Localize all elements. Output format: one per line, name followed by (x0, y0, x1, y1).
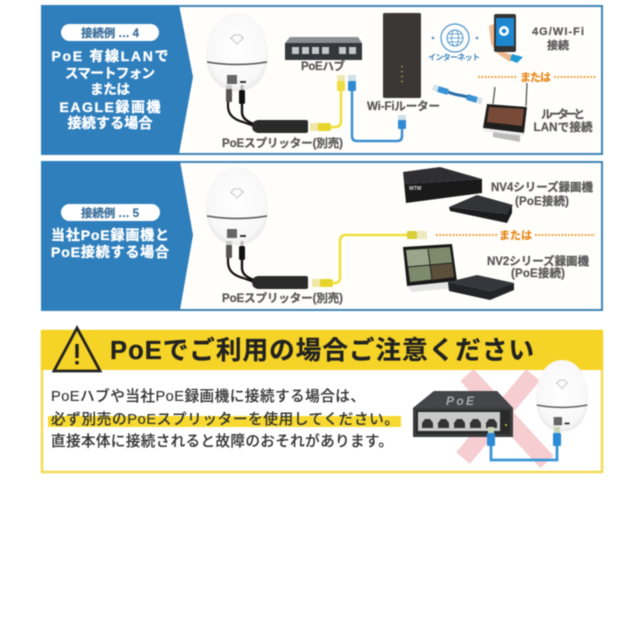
heading: blue arrow banner example 5 (41, 161, 193, 310)
text: NV4 series recorder: NV4シリーズ録画機 (491, 180, 594, 194)
icon: LAN cable router to monitor (433, 87, 482, 101)
arrow: yellow cable splitter to hub (310, 75, 345, 131)
icon: PoE hub (285, 37, 362, 60)
text: connect to router by LAN: LANで接続 (534, 120, 593, 134)
heading: blue arrow banner example 4: 接続例 … 4 (81, 26, 140, 40)
icon: PoE hub: PoE (446, 394, 475, 408)
icon: internet globe (432, 24, 478, 52)
heading: blue arrow banner example 4: 接続する場合 (68, 115, 152, 131)
icon: Wi-Fi router (383, 13, 421, 98)
panel: connection example 5 (41, 161, 602, 310)
heading: blue arrow banner example 4: PoE 有線LANで (52, 48, 168, 64)
icon: red cross (463, 375, 547, 462)
text: NV2 series recorder: NV2シリーズ録画機 (487, 254, 590, 268)
text: 4G/Wi-Fi connection: 4G/WI-Fi (532, 26, 584, 38)
text: connect to router by LAN (534, 108, 593, 134)
label: Wi-Fi router: Wi-Fiルーター (367, 100, 440, 113)
heading: blue arrow banner example 5: 接続例 … 5 (81, 206, 140, 220)
icon: PoE splitter with cables (226, 85, 308, 133)
arrow: blue cable hub to camera (487, 427, 561, 460)
icon: PoE hub (413, 391, 513, 437)
text: NV4 series recorder (491, 180, 594, 208)
label: PoE splitter: PoEスプリッター(別売) (222, 136, 343, 150)
icon: dome camera (206, 167, 268, 245)
arrow: yellow cable splitter to recorder (312, 231, 427, 287)
label: PoE splitter: PoEスプリッター(別売) (222, 291, 343, 305)
text: caution body: PoEハブや当社PoE録画機に接続する場合は、 (51, 387, 365, 405)
text: NV2 series recorder: (PoE接続) (511, 266, 565, 280)
icon: monitor recorder (483, 83, 527, 142)
icon: NV4 small recorder (449, 195, 513, 223)
heading band: caution title (41, 330, 603, 370)
panel: PoE caution (41, 328, 603, 472)
text: caution body: 直接本体に接続されると故障のおそれがあります。 (51, 432, 393, 450)
icon: NV4 large recorder (403, 167, 482, 203)
highlight: marker (48, 416, 401, 427)
text: 4G/Wi-Fi connection: 接続 (547, 38, 569, 52)
arrow: blue cable hub to router (348, 75, 406, 141)
divider: or: または (520, 71, 551, 84)
text: NV2 series recorder (487, 254, 590, 280)
text: connect to router by LAN: ルーターと (541, 108, 585, 121)
panel: connection example 4 (41, 5, 602, 154)
heading band: caution title: PoEでご利用の場合ご注意ください (110, 336, 534, 365)
icon: dome camera (536, 360, 588, 432)
icon: NV2 recorder (448, 275, 514, 300)
heading: blue arrow banner example 4: EAGLE録画機 (60, 99, 160, 115)
text: caution body (51, 387, 399, 450)
icon: monitor recorder (403, 244, 457, 292)
label: PoE hub: PoEハブ (301, 59, 346, 73)
heading: blue arrow banner example 4 (41, 5, 193, 154)
text: caution body: 必ず別売のPoEスプリッターを使用してください。 (51, 411, 399, 428)
heading: blue arrow banner example 4: スマートフォン (65, 66, 155, 81)
icon: smartphone in hand (489, 14, 523, 63)
icon: warning triangle (54, 328, 100, 371)
text: NV4 series recorder: (PoE接続) (515, 194, 569, 208)
heading: blue arrow banner example 5: 当社PoE録画機と (51, 227, 169, 243)
heading: blue arrow banner example 5: PoE接続する場合 (51, 244, 169, 260)
label: internet: インターネット (428, 52, 480, 62)
divider: or (478, 71, 596, 84)
heading: blue arrow banner example 4: または (90, 82, 130, 97)
icon: NV4 large recorder: WTW (409, 186, 422, 192)
icon: PoE splitter with cables (226, 241, 308, 289)
icon: dome camera (206, 13, 268, 91)
text: 4G/Wi-Fi connection (532, 26, 584, 52)
divider: or: または (499, 229, 532, 242)
